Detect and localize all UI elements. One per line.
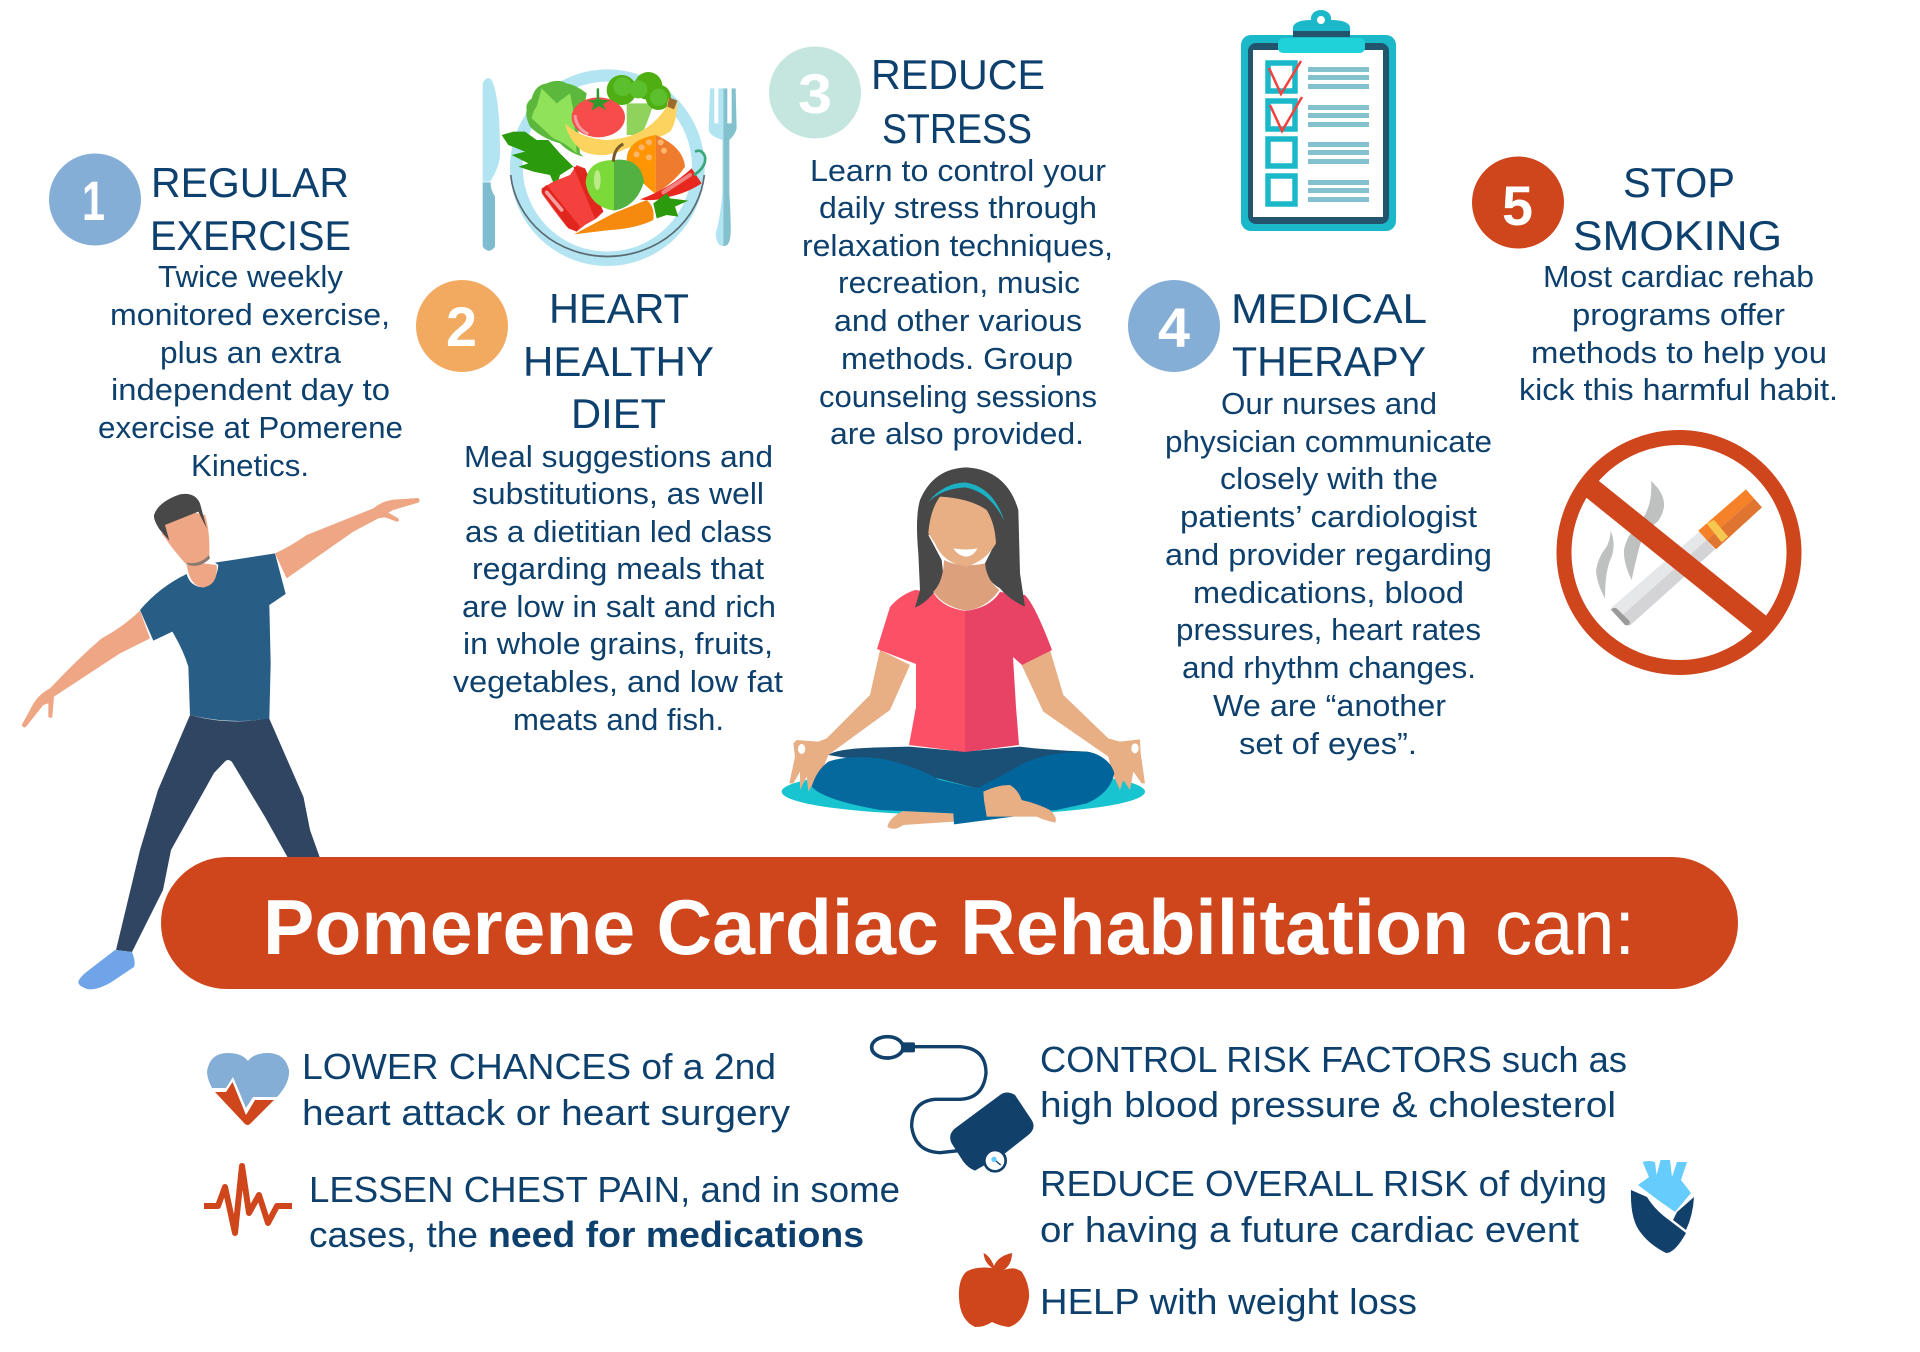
prohibition ring and slash — [1564, 438, 1794, 668]
heading: regular exercise — [150, 159, 351, 259]
text: control risk factors: high blood pressure & cholesterol — [1040, 1084, 1616, 1125]
text: control risk factors — [1040, 1039, 1627, 1125]
benefit: lessen chest pain — [204, 1166, 900, 1255]
body text: medical therapy — [1165, 386, 1492, 761]
body text: heart healthy diet: substitutions, as well — [472, 476, 764, 511]
panel: step 3 reduce stress — [769, 46, 1113, 451]
badge 2 — [416, 280, 508, 372]
illustration: exercising man — [22, 494, 420, 989]
body text: reduce stress: recreation, music — [838, 265, 1080, 300]
checkboxes — [1268, 63, 1295, 204]
icon: heart with pulse — [207, 1053, 289, 1125]
text: lower chances — [302, 1046, 790, 1133]
icon: ecg pulse — [204, 1166, 292, 1233]
checklist lines — [1308, 67, 1369, 202]
body text: stop smoking — [1519, 259, 1838, 407]
heading: medical therapy: THERAPY — [1232, 338, 1426, 385]
parsley — [502, 132, 573, 188]
badge 4 — [1128, 280, 1220, 372]
red check marks — [1269, 61, 1302, 131]
panel: step 2 heart healthy diet — [416, 280, 783, 737]
illustration: clipboard checklist — [1241, 10, 1396, 231]
plate — [510, 69, 705, 266]
banner — [161, 857, 1738, 989]
icon: blood pressure cuff — [872, 1037, 1034, 1171]
clipboard board — [1241, 35, 1396, 231]
body text: reduce stress: Learn to control your — [810, 153, 1106, 188]
badge 1 — [49, 154, 141, 246]
heading: regular exercise: REGULAR — [151, 159, 349, 206]
body text: heart healthy diet: as a dietitian led class — [465, 514, 772, 549]
head and hair — [915, 467, 1025, 611]
foot — [78, 950, 135, 989]
body text: medical therapy: Our nurses and — [1221, 386, 1437, 421]
icon: anatomical heart — [1631, 1160, 1694, 1253]
benefit: control risk factors — [872, 1037, 1627, 1171]
body text: reduce stress — [802, 153, 1113, 451]
heading: heart healthy diet: HEALTHY — [523, 338, 714, 385]
illustration: meditating woman — [782, 467, 1145, 829]
clipboard inner — [1248, 43, 1389, 224]
heading: heart healthy diet: DIET — [571, 390, 666, 437]
heading: heart healthy diet: HEART — [549, 285, 689, 332]
heading: stop smoking: STOP — [1623, 159, 1735, 206]
heading: regular exercise: EXERCISE — [150, 212, 351, 259]
badge 3: 3 — [798, 62, 832, 125]
benefit: lower chances — [207, 1046, 790, 1133]
illustration: plate of food with knife and fork — [483, 69, 737, 266]
banner suffix: can: — [1495, 883, 1635, 971]
banana — [565, 97, 677, 155]
body text: heart healthy diet: are low in salt and rich — [462, 589, 776, 624]
body text: medical therapy: and provider regarding — [1165, 537, 1492, 572]
body text: medical therapy: We are “another — [1213, 688, 1446, 723]
green apple — [586, 144, 644, 211]
text: reduce overall risk: or having a future cardiac event — [1040, 1209, 1579, 1250]
tomato — [572, 88, 625, 137]
text: lower chances: LOWER CHANCES of a 2nd — [302, 1046, 776, 1087]
icon: apple — [959, 1253, 1029, 1327]
body text: stop smoking: methods to help you — [1531, 335, 1827, 370]
body text: stop smoking: kick this harmful habit. — [1519, 372, 1838, 407]
heading: heart healthy diet — [523, 285, 714, 437]
body text: medical therapy: physician communicate — [1165, 424, 1492, 459]
body text: stop smoking: programs offer — [1572, 297, 1785, 332]
body text: medical therapy: medications, blood — [1193, 575, 1464, 610]
body text: medical therapy: patients’ cardiologist — [1180, 499, 1477, 534]
body text: medical therapy: and rhythm changes. — [1182, 650, 1476, 685]
heading: reduce stress: REDUCE — [871, 51, 1045, 98]
heading: reduce stress — [871, 51, 1045, 152]
body text: medical therapy: pressures, heart rates — [1176, 612, 1481, 647]
body text: reduce stress: methods. Group — [841, 341, 1073, 376]
body text: reduce stress: counseling sessions — [819, 379, 1097, 414]
lettuce — [526, 81, 587, 157]
paper — [1253, 50, 1383, 217]
body text: medical therapy: closely with the — [1220, 461, 1438, 496]
text: lessen chest pain: LESSEN CHEST PAIN, and in some — [309, 1169, 900, 1210]
fork — [709, 88, 737, 246]
banner title: Pomerene Cardiac Rehabilitation — [263, 883, 1469, 971]
body text: heart healthy diet: Meal suggestions and — [464, 439, 773, 474]
body text: heart healthy diet: regarding meals that — [472, 551, 764, 586]
text: reduce overall risk — [1040, 1163, 1607, 1250]
orange — [627, 135, 685, 194]
text: lessen chest pain: need for medications — [488, 1214, 864, 1255]
body text: regular exercise — [98, 259, 403, 483]
bell pepper — [542, 165, 603, 232]
text: lessen chest pain: cases, the — [309, 1214, 478, 1255]
body text: stop smoking: Most cardiac rehab — [1543, 259, 1814, 294]
text: lower chances: heart attack or heart surgery — [302, 1092, 790, 1133]
body text: regular exercise: plus an extra — [160, 335, 342, 370]
broccoli — [607, 72, 671, 135]
badge 3 — [769, 46, 861, 138]
body text: regular exercise: independent day to — [111, 372, 390, 407]
lower body and arms — [782, 650, 1145, 829]
knife — [483, 78, 500, 251]
badge 4: 4 — [1158, 296, 1190, 359]
heading: medical therapy — [1231, 285, 1427, 385]
panel: step 1 regular exercise — [49, 154, 403, 483]
body text: reduce stress: relaxation techniques, — [802, 228, 1113, 263]
body text: heart healthy diet — [453, 439, 783, 737]
heading: stop smoking: SMOKING — [1573, 212, 1782, 259]
panel: step 5 stop smoking — [1472, 156, 1838, 407]
body text: medical therapy: set of eyes”. — [1239, 726, 1417, 761]
panel: step 4 medical therapy — [1128, 280, 1492, 761]
benefit: help with weight loss — [959, 1253, 1417, 1327]
body text: regular exercise: Twice weekly — [158, 259, 344, 294]
heading: stop smoking — [1573, 159, 1782, 259]
text: lessen chest pain — [309, 1169, 900, 1255]
body text: regular exercise: exercise at Pomerene — [98, 410, 403, 445]
shirt — [877, 590, 1052, 752]
badge 5 — [1472, 156, 1564, 248]
clip — [1278, 10, 1365, 53]
chili pepper — [640, 151, 705, 200]
upper body — [22, 494, 420, 727]
trousers — [116, 715, 320, 952]
body text: heart healthy diet: vegetables, and low fat — [453, 664, 783, 699]
badge 1: 1 — [82, 169, 105, 232]
text: reduce overall risk: REDUCE OVERALL RISK of dying — [1040, 1163, 1607, 1204]
body text: regular exercise: Kinetics. — [191, 448, 309, 483]
body text: heart healthy diet: in whole grains, fruits, — [463, 626, 773, 661]
benefit: reduce overall risk — [1040, 1160, 1694, 1253]
body text: regular exercise: monitored exercise, — [110, 297, 390, 332]
heading: medical therapy: MEDICAL — [1231, 285, 1427, 332]
badge 2: 2 — [446, 295, 477, 358]
cigarette and smoke — [1596, 481, 1762, 626]
heading: reduce stress: STRESS — [882, 105, 1032, 152]
text: control risk factors: CONTROL RISK FACTORS such as — [1040, 1039, 1627, 1080]
carrot — [574, 193, 688, 234]
body text: reduce stress: are also provided. — [830, 416, 1084, 451]
body text: reduce stress: daily stress through — [819, 190, 1097, 225]
badge 5: 5 — [1502, 174, 1533, 237]
icon: no smoking sign — [1564, 438, 1794, 668]
text: help with weight loss: HELP with weight loss — [1040, 1281, 1417, 1322]
body text: reduce stress: and other various — [834, 303, 1082, 338]
body text: heart healthy diet: meats and fish. — [513, 702, 724, 737]
